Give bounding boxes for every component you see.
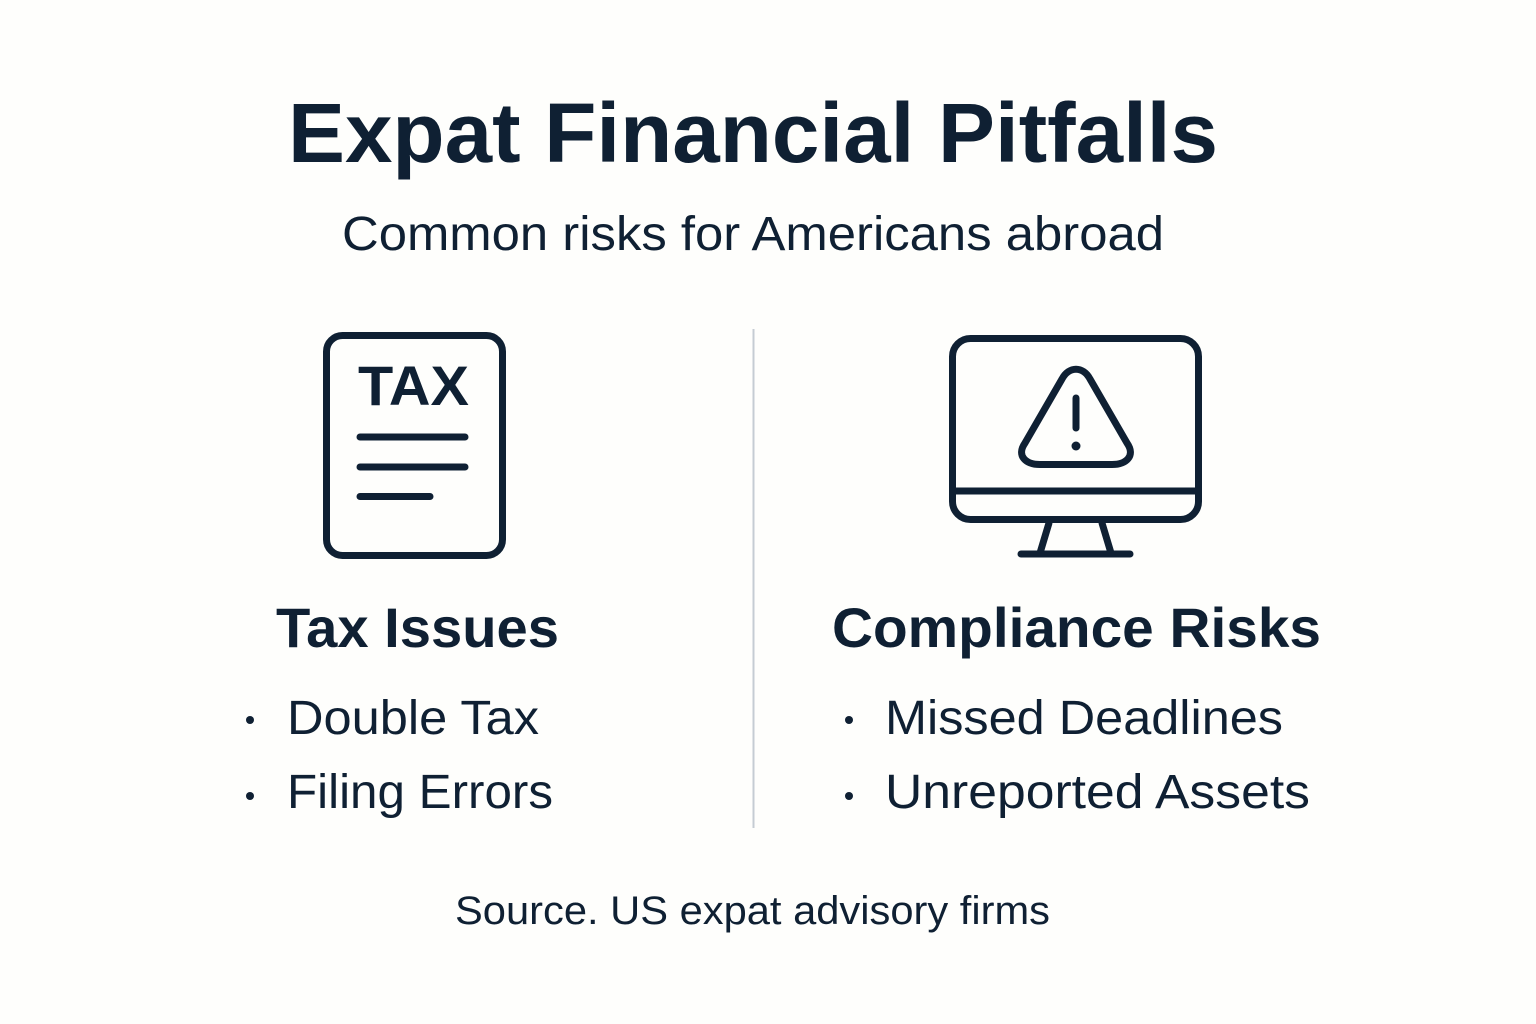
subtitle: Common risks for Americans abroad <box>342 208 1164 261</box>
icon: tax document: TAX <box>358 354 469 417</box>
title: Expat Financial Pitfalls <box>288 86 1218 180</box>
panel: compliance risks <box>832 338 1321 819</box>
icon: monitor with warning triangle <box>952 338 1198 554</box>
list: compliance risks: Missed Deadlines <box>885 692 1283 745</box>
list: compliance risks <box>845 692 1310 819</box>
heading: tax issues: Tax Issues <box>276 596 559 659</box>
list: compliance risks: Unreported Assets <box>885 766 1310 819</box>
list: tax issues: Double Tax <box>287 692 539 745</box>
heading: compliance risks: Compliance Risks <box>832 596 1321 659</box>
icon: tax document <box>326 336 502 556</box>
source note: Source. US expat advisory firms <box>455 889 1050 933</box>
panel: tax issues <box>246 336 559 819</box>
list: tax issues <box>246 692 553 819</box>
list: tax issues: Filing Errors <box>287 766 553 819</box>
